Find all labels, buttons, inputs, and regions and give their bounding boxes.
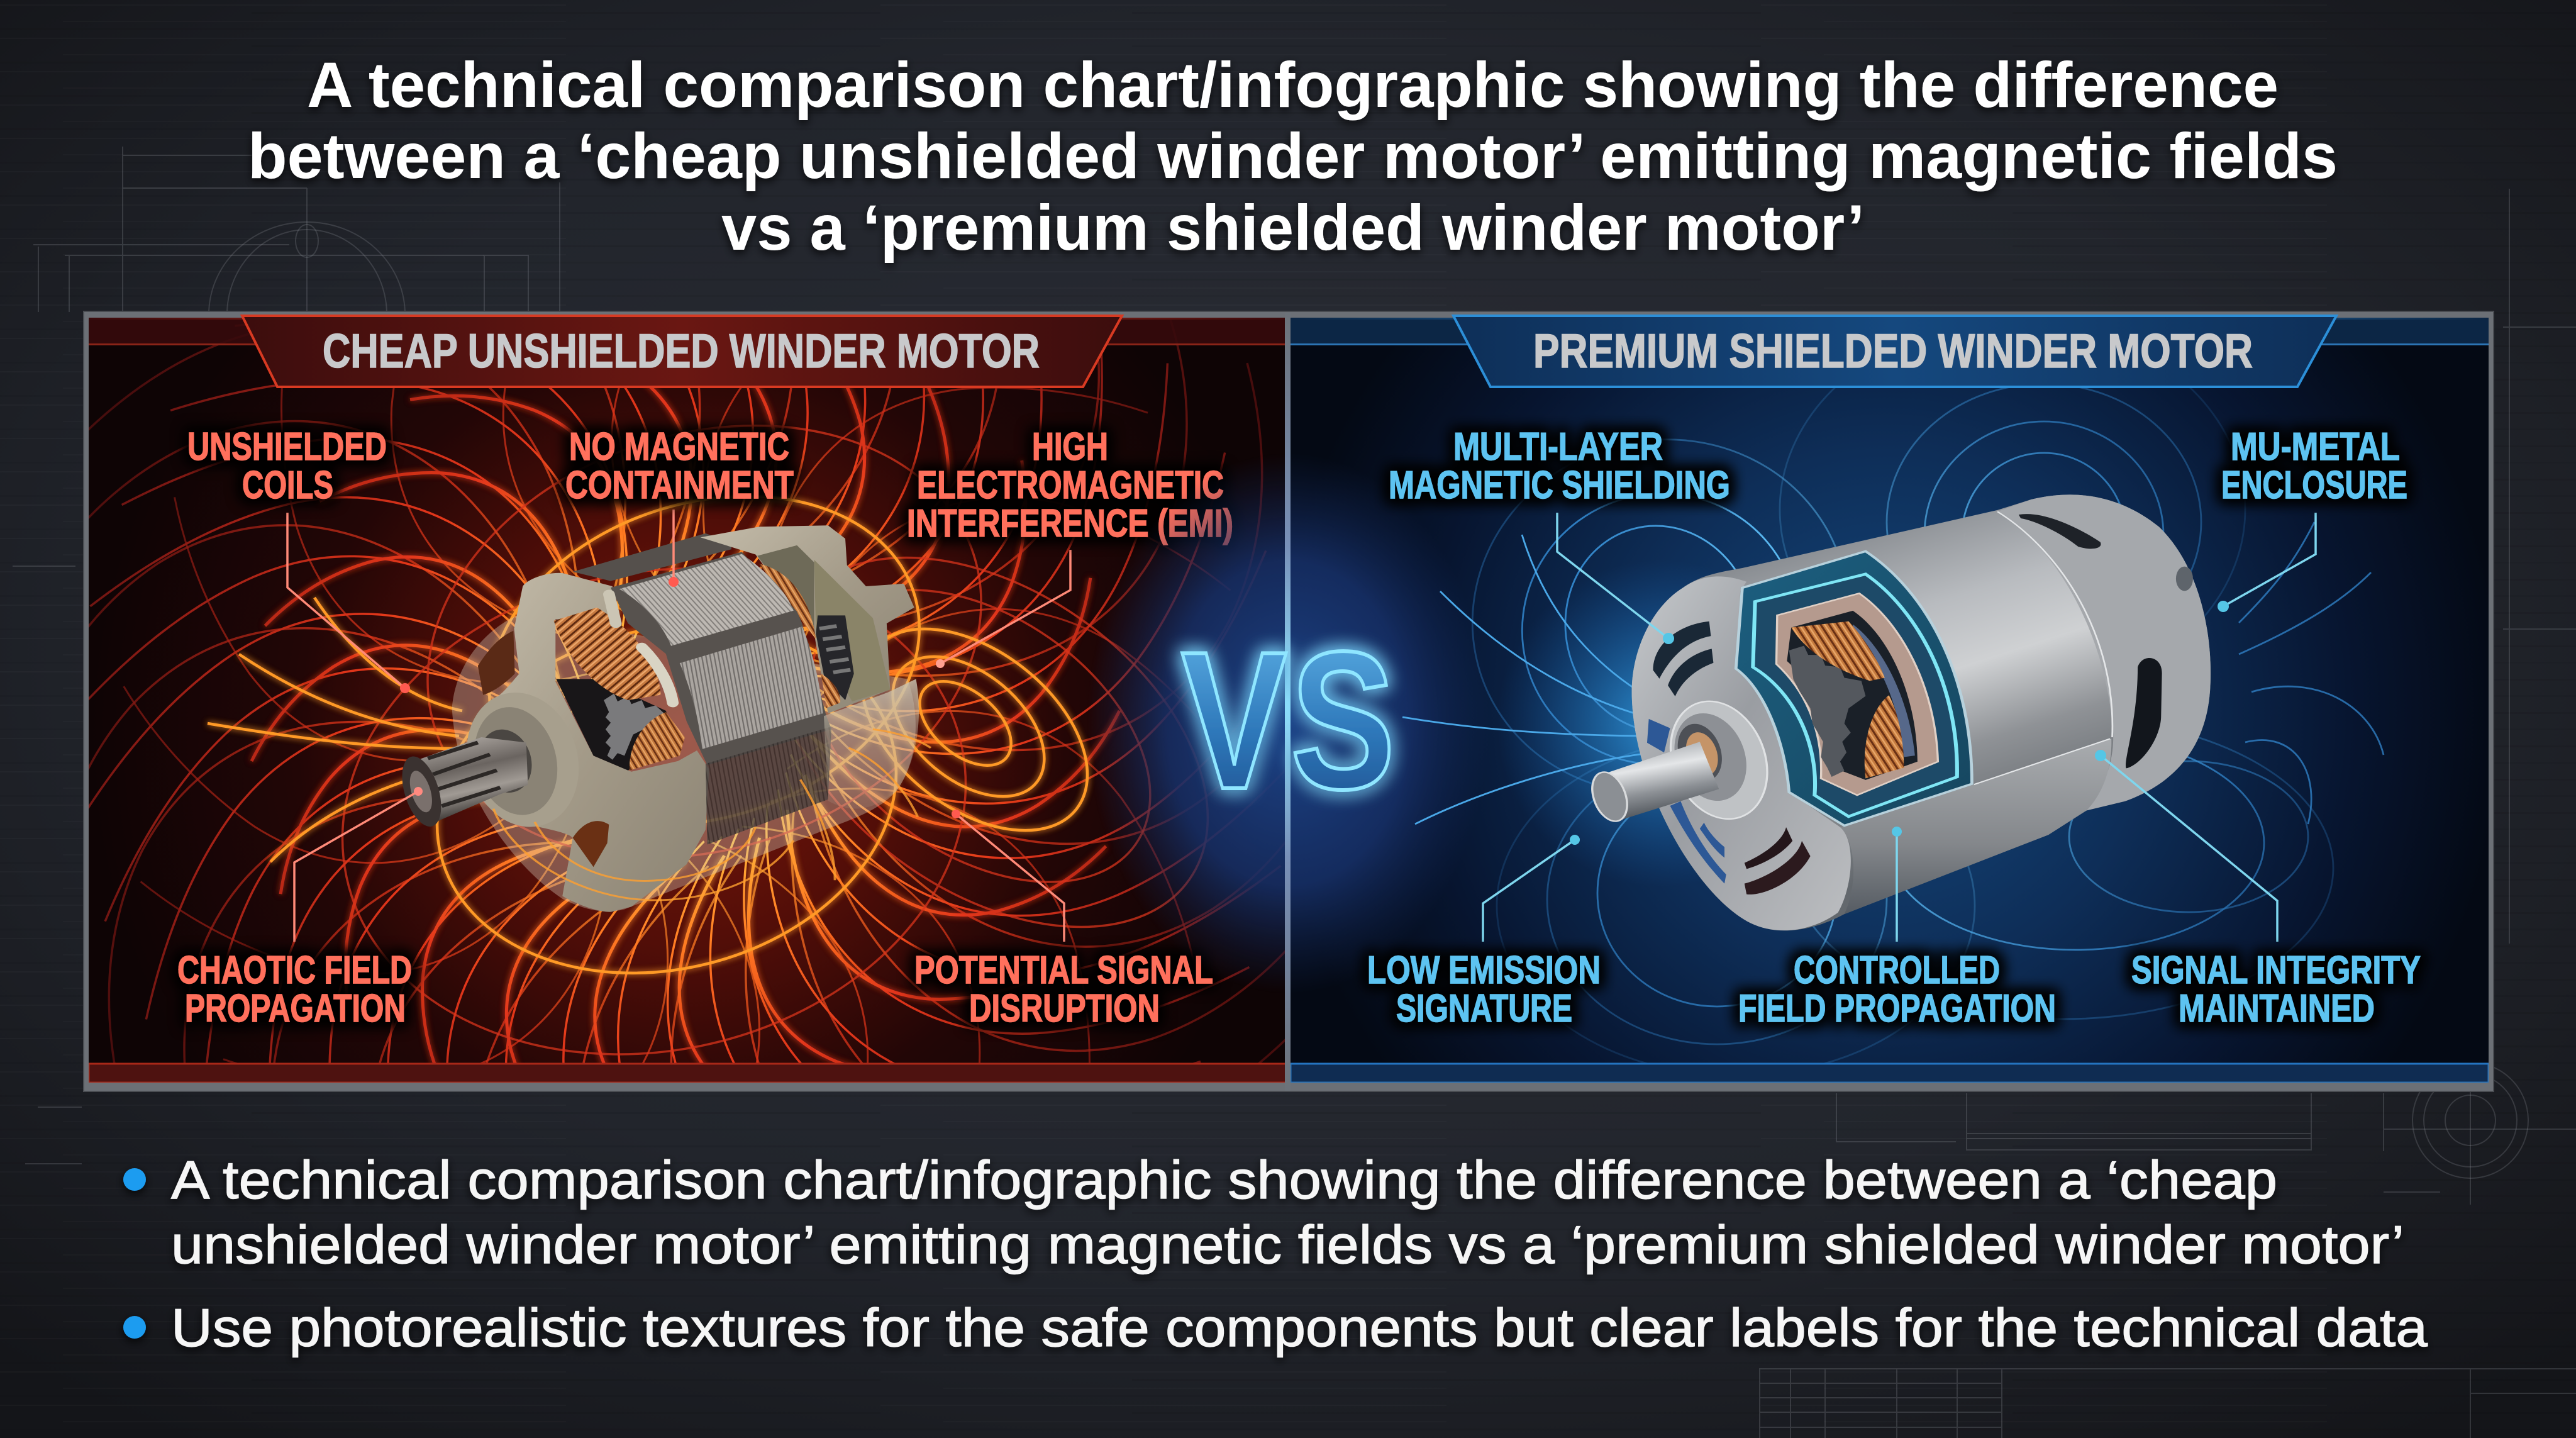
callout: unshielded coils: COILS <box>242 464 333 507</box>
white bobbin clip <box>641 647 673 703</box>
callout: low emission signature: SIGNATURE <box>1396 987 1572 1030</box>
stator dark core <box>611 552 831 765</box>
panel: cheap unshielded winder motor <box>89 318 2366 1083</box>
panel: premium shielded winder motor <box>1087 316 2489 1083</box>
shaft <box>1608 742 1719 820</box>
lower translucent lamination block <box>706 727 831 844</box>
callout: chaotic field propagation: CHAOTIC FIELD <box>177 949 412 992</box>
magnetic field lines: contained blue loops <box>1402 321 2384 1076</box>
bobbin top <box>609 594 616 623</box>
callout: no magnetic containment: CONTAINMENT <box>565 464 794 507</box>
header line: blue <box>1291 316 2489 320</box>
callout: high EMI: ELECTROMAGNETIC <box>917 464 1224 507</box>
rear frame <box>701 525 914 713</box>
flow lines over the translucent shell <box>494 729 931 900</box>
callout: high EMI: INTERFERENCE (EMI) <box>907 502 1233 545</box>
bottom bar: blue <box>1291 1064 2489 1083</box>
motor: shielded silver motor with cutaway <box>1587 494 2211 930</box>
commutator teeth <box>604 694 664 760</box>
callout: high EMI <box>907 425 1233 668</box>
callout: chaotic field propagation: PROPAGATION <box>185 987 406 1030</box>
callout: signal integrity maintained: MAINTAINED <box>2179 987 2375 1030</box>
callout: multi-layer magnetic shielding: MAGNETIC SHIELDING <box>1389 464 1730 507</box>
callout: signal integrity maintained: SIGNAL INTEGRITY <box>2131 949 2421 992</box>
shaft end <box>1587 770 1633 823</box>
bottom bar: red <box>89 1064 1286 1083</box>
callout: low emission signature <box>1367 835 1601 1030</box>
top slot <box>2019 514 2101 549</box>
title: between a ‘cheap unshielded winder motor’ emitting magnetic fields <box>248 120 2338 192</box>
glow near VS: left side <box>1087 453 1489 994</box>
magnetic field lines: chaotic red swirl <box>89 323 1285 1063</box>
pinion end <box>395 754 448 829</box>
callout: multi-layer magnetic shielding: MULTI-LAYER <box>1453 425 1663 469</box>
callout: chaotic field propagation <box>177 787 423 1030</box>
front face <box>1632 576 1851 930</box>
top bar: red <box>89 318 1286 344</box>
callout: mu-metal enclosure: ENCLOSURE <box>2221 464 2407 507</box>
front frame window: lower <box>573 821 609 867</box>
header: cheap unshielded winder motor <box>242 316 1122 387</box>
upper copper coil <box>554 608 661 700</box>
rear gear <box>816 615 854 700</box>
callout: unshielded coils <box>187 425 410 693</box>
silver body <box>1632 494 2211 930</box>
header line: red <box>89 316 1286 320</box>
dark stator top <box>573 533 731 581</box>
top lamination block <box>619 554 794 646</box>
bullet 2: Use photorealistic textures for the safe components but clear labels for the technical data <box>171 1298 2428 1358</box>
title: vs a ‘premium shielded winder motor’ <box>721 192 1865 264</box>
callout: controlled field propagation <box>1738 827 2056 1030</box>
callout: controlled field propagation: FIELD PROPAGATION <box>1738 987 2056 1030</box>
upper coil <box>1791 621 1885 681</box>
rotor teeth <box>1789 646 1865 777</box>
seam <box>1974 511 2112 784</box>
callout: high EMI: HIGH <box>1032 425 1108 469</box>
glow near VS: right side <box>1087 453 1489 994</box>
shield layer: outer <box>1736 551 1972 826</box>
callout: unshielded coils: UNSHIELDED <box>187 425 387 469</box>
frame lower corner <box>824 679 919 808</box>
callout: signal integrity maintained <box>2095 750 2421 1030</box>
front frame window: upper-left <box>478 631 515 695</box>
header: cheap unshielded winder motor: CHEAP UNSHIELDED WINDER MOTOR <box>323 325 1040 378</box>
shield layer: cyan <box>1753 574 1957 817</box>
top bar: blue <box>1291 318 2489 344</box>
title: A technical comparison chart/infographic showing the difference <box>307 49 2279 121</box>
middle lamination block <box>680 627 823 749</box>
pinion shaft <box>411 737 528 825</box>
callout: potential signal disruption: DISRUPTION <box>969 987 1160 1030</box>
VS badge <box>1181 610 1395 830</box>
rear end cap <box>1997 494 2211 810</box>
bullet 1 <box>123 1151 2404 1275</box>
title <box>248 49 2338 264</box>
callout: no magnetic containment <box>565 425 794 587</box>
lower body section <box>1840 739 2111 914</box>
callout: no magnetic containment: NO MAGNETIC <box>569 425 789 469</box>
bullet 1: unshielded winder motor’ emitting magnetic fields vs a ‘premium shielded winder motor’ <box>171 1215 2404 1275</box>
callout: mu-metal enclosure <box>2218 425 2407 612</box>
rear bump <box>2176 567 2193 591</box>
callout: potential signal disruption <box>914 810 1213 1030</box>
motor: cutaway cheap motor with translucent housing <box>395 525 931 912</box>
front boss <box>1658 696 1779 825</box>
inner cavity <box>1787 611 1918 780</box>
bullet 1: A technical comparison chart/infographic showing the difference between a ‘cheap <box>171 1151 2277 1210</box>
stator band <box>1853 625 1915 757</box>
lower coil <box>1865 695 1904 778</box>
shield layer: copper tone <box>1776 593 1938 795</box>
callout: multi-layer magnetic shielding <box>1389 425 1730 644</box>
callout: controlled field propagation: CONTROLLED <box>1794 949 2000 992</box>
comparison frame <box>84 311 2494 1091</box>
callout: mu-metal enclosure: MU-METAL <box>2231 425 2400 469</box>
header: premium shielded winder motor <box>1453 316 2336 387</box>
side slot <box>2126 658 2162 768</box>
header: premium shielded winder motor: PREMIUM SHIELDED WINDER MOTOR <box>1533 325 2253 378</box>
rear copper coil <box>759 564 816 639</box>
VS badge: S <box>1291 610 1395 830</box>
lower copper coil <box>630 712 685 771</box>
beige front frame <box>478 573 709 912</box>
callout: low emission signature: LOW EMISSION <box>1367 949 1601 992</box>
translucent shell <box>452 615 916 911</box>
bullet list <box>123 1151 2428 1358</box>
callout: potential signal disruption: POTENTIAL SIGNAL <box>914 949 1213 992</box>
vent slots <box>1647 621 1811 895</box>
bearing ring <box>456 687 590 832</box>
panel divider <box>1285 313 1291 1091</box>
VS badge: V <box>1181 611 1288 830</box>
rotor <box>556 679 680 771</box>
